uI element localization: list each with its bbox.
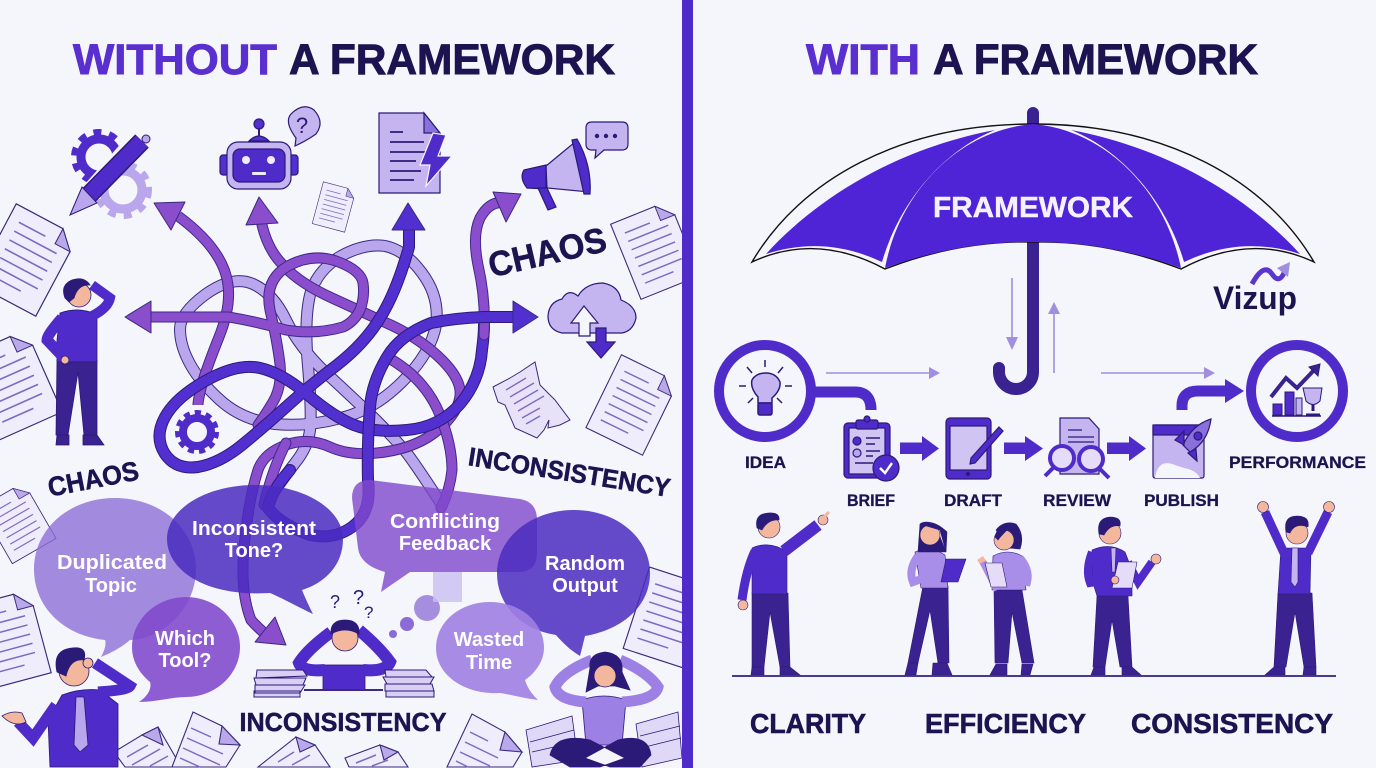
connector: idea to brief (815, 392, 871, 410)
label: chaos right: CHAOS (485, 220, 610, 285)
bottom papers (114, 712, 522, 767)
figure: seated stressed woman (526, 652, 682, 767)
bubble text: Conflicting (390, 511, 500, 533)
node: idea (719, 345, 811, 437)
title: without a framework: A FRAMEWORK (289, 36, 615, 84)
icon: robot with question bubble (220, 107, 320, 189)
title: without a framework: WITHOUT (73, 36, 277, 84)
icon: chart and trophy (1271, 364, 1322, 415)
bubble text (57, 511, 625, 674)
bubble: conflicting feedback (352, 480, 537, 592)
bubble text: Inconsistent (192, 518, 316, 540)
thought bubble dots (389, 595, 440, 638)
umbrella handle (999, 113, 1033, 389)
umbrella canopy (752, 124, 1314, 269)
outcome labels: EFFICIENCY (925, 708, 1086, 739)
label: inconsistency bottom: INCONSISTENCY (240, 707, 446, 737)
tangled arrows (150, 203, 515, 636)
bubble text: Output (552, 575, 618, 597)
icon: publish rocket (1153, 419, 1211, 478)
thin flow arrows (826, 278, 1215, 379)
bubble text: Random (545, 553, 625, 575)
title: with a framework: WITH (806, 36, 920, 84)
umbrella label: FRAMEWORK (933, 192, 1133, 224)
bubble: random output (497, 510, 650, 656)
bubble text: Topic (85, 575, 137, 597)
question marks: ? (330, 592, 340, 612)
panel: without a framework (0, 36, 713, 767)
bubble text: Duplicated (57, 552, 167, 574)
connector: publish to performance (1182, 379, 1244, 410)
figure: man celebrating (1258, 502, 1334, 675)
bubble: which tool (132, 597, 240, 702)
ground line (732, 675, 1336, 677)
workflow labels: PUBLISH (1144, 491, 1219, 510)
figure: woman with tablet (905, 522, 966, 675)
logo: vizup (1213, 262, 1297, 316)
bubble text: Feedback (399, 533, 492, 555)
label: chaos left: CHAOS (45, 456, 141, 503)
figure: confused man standing (47, 279, 110, 445)
icon: brief clipboard (844, 416, 899, 481)
workflow labels (745, 453, 1366, 510)
icon: cloud with up and down arrows (548, 283, 636, 358)
flow arrows (900, 436, 1146, 461)
question marks (330, 590, 373, 618)
bubble: duplicated topic (34, 498, 196, 657)
question marks: ? (353, 587, 364, 609)
outcome labels: CLARITY (750, 708, 866, 739)
paper stacks on desk (254, 670, 434, 697)
icon: gear on tangle (178, 413, 216, 451)
bubble: inconsistent tone (167, 485, 343, 614)
figure: woman with notes (980, 523, 1034, 675)
scattered paper documents (0, 182, 713, 767)
workflow labels: BRIEF (847, 491, 895, 510)
question marks: ? (364, 603, 373, 622)
title: with a framework: A FRAMEWORK (933, 36, 1258, 84)
workflow labels: REVIEW (1043, 491, 1112, 510)
arrowheads (125, 192, 538, 645)
icon: review document (1045, 418, 1109, 478)
logo: vizup: Vizup (1213, 280, 1297, 316)
bubble text: Time (466, 652, 512, 674)
umbrella (752, 113, 1314, 389)
bubble text: Tone? (225, 540, 283, 562)
workflow labels: DRAFT (944, 491, 1003, 510)
divider (682, 0, 693, 768)
label: inconsistency right: INCONSISTENCY (466, 441, 672, 503)
outcome labels (750, 708, 1333, 739)
icon: draft tablet (946, 418, 1003, 479)
node: performance (1251, 345, 1343, 437)
bubble text: Wasted (454, 629, 524, 651)
icon: document with lightning bolt (379, 113, 452, 193)
outcome labels: CONSISTENCY (1131, 708, 1333, 739)
bubble text: Which (155, 628, 215, 650)
icon: gear and pen (70, 130, 152, 216)
figure: man pointing (738, 512, 829, 675)
bubble text: Tool? (159, 650, 211, 672)
speech bubbles (34, 480, 650, 702)
figure: man with document (1088, 517, 1161, 675)
icon: megaphone with speech bubble (522, 122, 628, 210)
workflow labels: IDEA (745, 453, 786, 472)
title: without a framework (72, 44, 616, 75)
figure: worried man with tie (2, 648, 130, 767)
panel: with a framework (719, 36, 1366, 739)
figure: stressed man at desk (299, 620, 390, 690)
workflow labels: PERFORMANCE (1229, 453, 1366, 472)
crumpled paper (493, 362, 570, 438)
bubble: wasted time (436, 602, 544, 700)
icon: light bulb (739, 360, 792, 415)
icon: robot with question bubble: ? (296, 113, 308, 138)
